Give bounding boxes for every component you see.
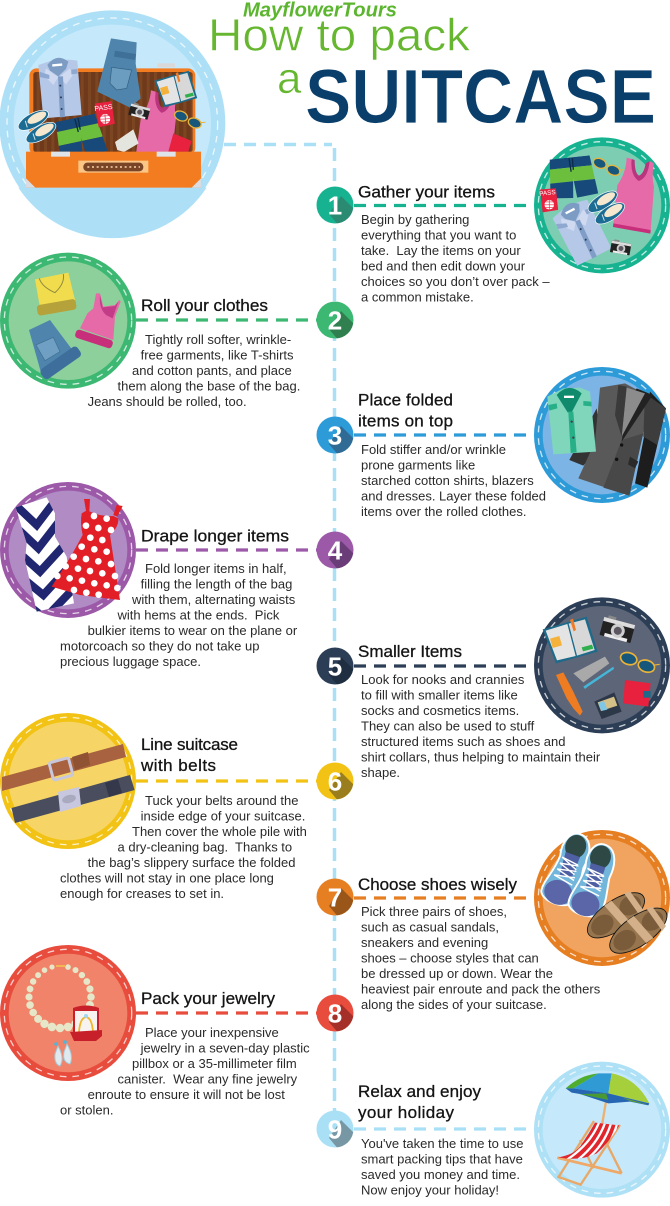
connector — [354, 664, 534, 668]
body text: and cotton pants, and place — [132, 363, 292, 378]
body text: shirt collars, thus helping to maintain their — [361, 750, 601, 764]
badge 6: 6 — [328, 766, 342, 796]
icon: clothes and travel items — [534, 137, 670, 273]
body text: socks and cosmetics items. — [361, 703, 519, 718]
badge 2 — [316, 302, 354, 338]
badge 3 — [316, 416, 354, 454]
body text: Tuck your belts around the — [145, 793, 298, 808]
heading: Place folded — [358, 390, 453, 410]
heading: Relax and enjoy — [358, 1082, 482, 1101]
heading: a: a — [277, 54, 302, 103]
step 5: smaller items — [316, 597, 670, 780]
heading: Smaller Items — [358, 642, 462, 661]
heading: How to pack: How to pack — [208, 10, 471, 61]
heading: Pack your jewelry — [141, 989, 275, 1008]
body text: with hems at the ends. Pick — [116, 608, 280, 622]
body text: structured items such as shoes and — [361, 734, 566, 749]
badge 8 — [316, 994, 354, 1032]
body text: choices so you don’t over pack – — [361, 274, 550, 289]
badge 5 — [316, 648, 354, 684]
badge 9: 9 — [328, 1114, 342, 1144]
heading: Line suitcase — [141, 735, 238, 754]
badge 1: 1 — [328, 190, 342, 220]
connector: dashed timeline — [224, 144, 334, 1112]
connector — [136, 548, 317, 552]
badge 7: 7 — [328, 882, 342, 912]
icon: necklace, ring box and earrings — [0, 945, 136, 1081]
body text: canister. Wear any fine jewelry — [118, 1072, 298, 1086]
badge 2: 2 — [328, 306, 342, 336]
step 9: relax and enjoy your holiday — [316, 1062, 670, 1198]
body text: motorcoach so they do not take up — [60, 638, 259, 654]
heading: Roll your clothes — [141, 296, 268, 315]
body text: to fill with smaller items like — [361, 688, 518, 702]
body text: enough for creases to set in. — [60, 886, 224, 901]
icon: open suitcase: PASS — [94, 104, 113, 113]
body text: enroute to ensure it will not be lost — [88, 1087, 285, 1102]
icon: shirt and blazer — [534, 367, 670, 503]
body text: and dresses. Layer these folded — [361, 488, 546, 504]
step 7: choose shoes wisely — [316, 828, 670, 1012]
badge 4 — [316, 532, 354, 568]
body text: heaviest pair enroute and pack the others — [361, 982, 601, 996]
connector — [354, 433, 534, 437]
body text: the bag’s slippery surface the folded — [88, 855, 296, 870]
connector — [136, 1011, 317, 1015]
badge 4: 4 — [328, 536, 343, 566]
body text: jewelry in a seven-day plastic — [140, 1040, 310, 1056]
badge 5: 5 — [328, 652, 342, 682]
body text: smart packing tips that have — [361, 1152, 523, 1166]
body text: Then cover the whole pile with — [132, 824, 307, 839]
body text: Look for nooks and crannies — [361, 672, 525, 687]
body text: filling the length of the bag — [141, 576, 292, 592]
icon: open suitcase — [0, 10, 225, 238]
connector — [136, 318, 317, 322]
step 2: roll your clothes — [0, 253, 369, 409]
body text: Pick three pairs of shoes, — [361, 904, 507, 919]
body text: inside edge of your suitcase. — [141, 808, 305, 824]
step 1: gather your items — [316, 137, 670, 304]
badge 6 — [316, 762, 354, 800]
body text: You've taken the time to use — [361, 1136, 523, 1151]
badge 7 — [316, 878, 354, 916]
badge 9 — [316, 1110, 354, 1148]
heading: Gather your items — [358, 182, 495, 202]
body text: a dry-cleaning bag. Thanks to — [118, 840, 292, 854]
body text: starched cotton shirts, blazers — [361, 473, 534, 488]
heading: with belts — [140, 756, 216, 775]
body text: shoes – choose styles that can — [361, 950, 539, 966]
body text: Fold longer items in half, — [145, 561, 287, 576]
body text: shape. — [361, 765, 400, 780]
body text: Begin by gathering — [361, 212, 469, 227]
step 4: drape longer items — [0, 482, 369, 669]
body text: precious luggage space. — [60, 654, 201, 669]
badge 3: 3 — [328, 420, 342, 450]
body text: a common mistake. — [361, 290, 474, 304]
badge 8: 8 — [328, 998, 342, 1028]
heading: items on top — [358, 412, 453, 430]
step 3: place folded items on top — [316, 367, 670, 519]
body text: They can also be used to stuff — [361, 718, 535, 734]
step 8: pack your jewelry — [0, 945, 369, 1118]
icon: belts — [0, 713, 136, 849]
icon: dresses — [0, 482, 136, 618]
body text: Place your inexpensive — [145, 1025, 279, 1040]
body text: Jeans should be rolled, too. — [88, 394, 247, 409]
body text: pillbox or a 35-millimeter film — [132, 1056, 297, 1071]
body text: Now enjoy your holiday! — [361, 1182, 499, 1198]
icon: beach umbrella and deck chair — [534, 1062, 670, 1198]
body text: be dressed up or down. Wear the — [361, 966, 553, 981]
connector — [354, 896, 534, 900]
title — [208, 0, 656, 140]
icon: small travel items — [534, 597, 670, 733]
body text: such as casual sandals, — [361, 920, 499, 934]
connector — [136, 779, 317, 783]
heading: Drape longer items — [141, 526, 289, 546]
icon: rolled clothes — [0, 253, 136, 389]
connector — [354, 204, 534, 207]
body text: bulkier items to wear on the plane or — [88, 623, 298, 638]
connector — [354, 1127, 534, 1131]
body text: everything that you want to — [361, 228, 516, 242]
body text: with them, alternating waists — [131, 592, 296, 607]
body text: take. Lay the items on your — [361, 243, 521, 258]
heading: your holiday — [358, 1103, 454, 1122]
body text: Tightly roll softer, wrinkle- — [145, 332, 291, 347]
body text: clothes will not stay in one place long — [60, 870, 274, 886]
body text: bed and then edit down your — [361, 258, 526, 274]
body text: along the sides of your suitcase. — [361, 997, 547, 1012]
heading: Choose shoes wisely — [358, 875, 517, 894]
body text: Fold stiffer and/or wrinkle — [361, 442, 506, 457]
icon: clothes and travel items: PASS — [539, 189, 556, 198]
body text: prone garments like — [361, 458, 475, 472]
icon: sneakers and sandals — [534, 828, 670, 966]
body text: sneakers and evening — [361, 935, 488, 950]
step 6: line suitcase with belts — [0, 713, 369, 901]
body text: saved you money and time. — [361, 1167, 520, 1182]
body text: items over the rolled clothes. — [361, 504, 526, 519]
body text: free garments, like T-shirts — [141, 348, 294, 362]
badge 1 — [316, 186, 354, 224]
body text: them along the base of the bag. — [118, 378, 300, 394]
body text: or stolen. — [60, 1102, 113, 1118]
